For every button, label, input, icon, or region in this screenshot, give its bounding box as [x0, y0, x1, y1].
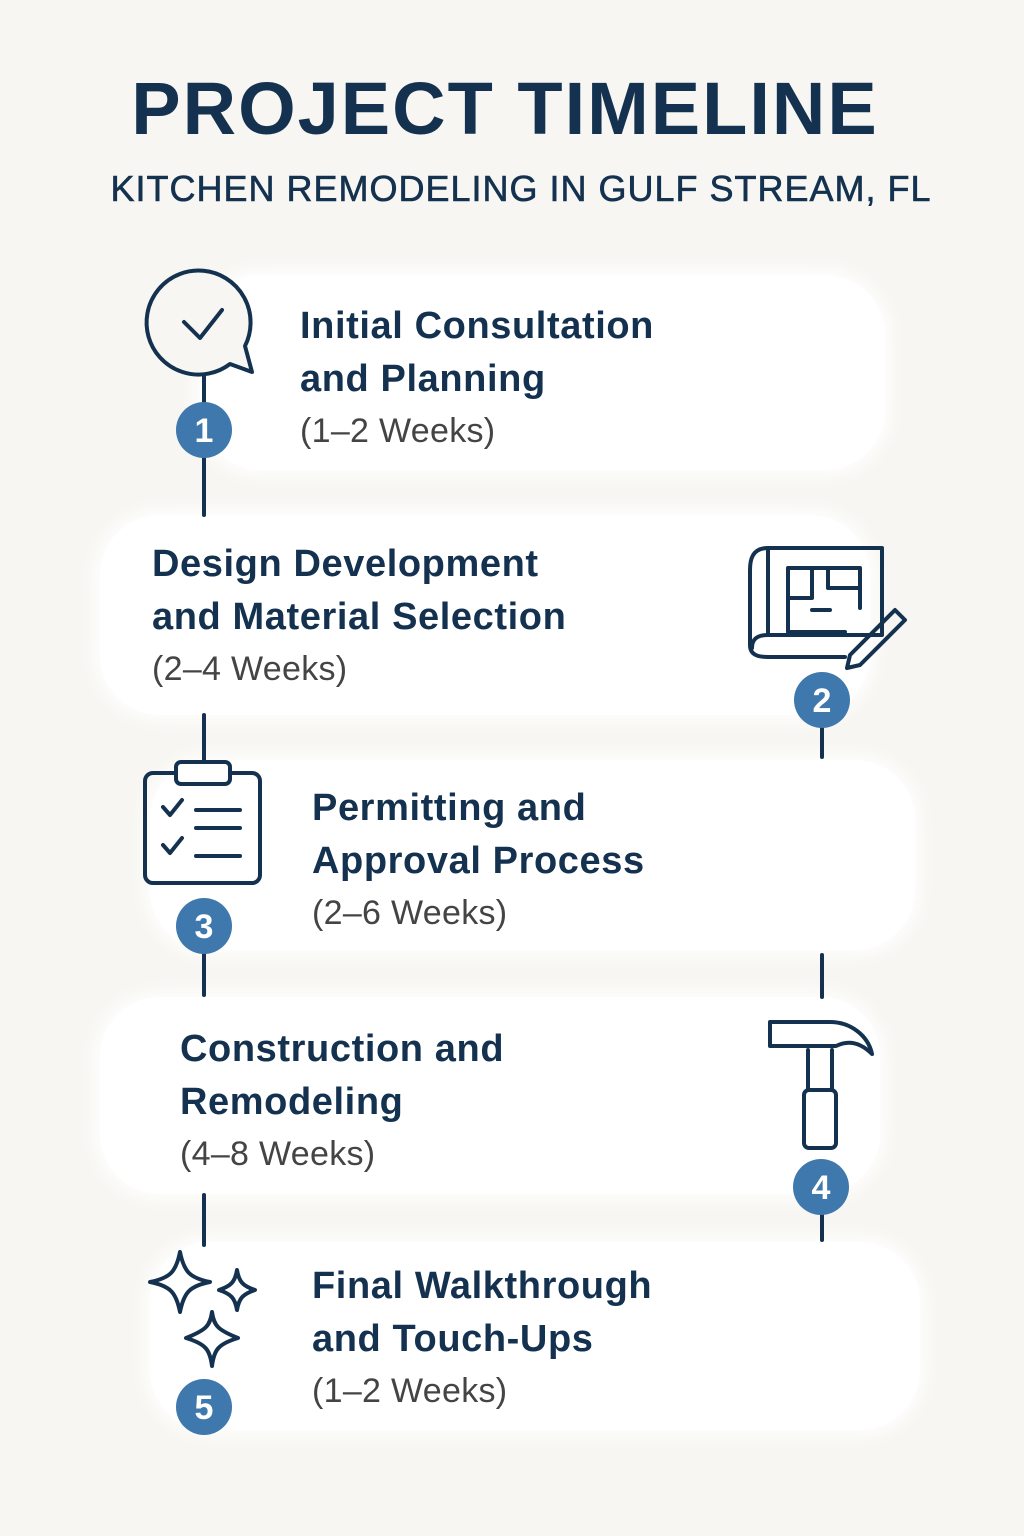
number badges: 5 [195, 1389, 213, 1427]
number badges: 1 [195, 412, 213, 450]
step 3 text: (2–6 Weeks) [312, 894, 507, 932]
card 3 [150, 760, 915, 950]
card 4 [100, 997, 880, 1194]
step 3 text: Permitting and [312, 787, 586, 829]
step 2 text: (2–4 Weeks) [152, 650, 347, 688]
number badges [176, 402, 850, 1435]
icon: chat check [147, 271, 252, 375]
number badges: 3 [195, 908, 213, 946]
step 5 text: Final Walkthrough [312, 1265, 652, 1307]
step 5 text: (1–2 Weeks) [312, 1372, 507, 1410]
title: PROJECT TIMELINE [131, 67, 879, 150]
step 5 text: and Touch-Ups [312, 1318, 594, 1360]
icon: sparkles [150, 1252, 255, 1366]
step 1 text: and Planning [300, 358, 546, 400]
card 2 [100, 515, 870, 715]
card 1 [200, 275, 885, 470]
icon: hammer [770, 1022, 872, 1148]
step 2 text: and Material Selection [152, 596, 566, 638]
step 5 text [312, 1265, 652, 1410]
step 4 text: (4–8 Weeks) [180, 1135, 375, 1173]
step 1 text [300, 305, 654, 450]
step 2 text: Design Development [152, 543, 539, 585]
icon: clipboard [145, 762, 260, 883]
number badges: 4 [812, 1169, 831, 1207]
card 5 [150, 1242, 920, 1430]
step 1 text: (1–2 Weeks) [300, 412, 495, 450]
step 4 text: Construction and [180, 1028, 504, 1070]
step 3 text: Approval Process [312, 840, 645, 882]
step 1 text: Initial Consultation [300, 305, 654, 347]
icon: blueprint [750, 548, 905, 668]
number badges: 2 [813, 682, 831, 720]
step 4 text [180, 1028, 504, 1173]
subtitle: KITCHEN REMODELING IN GULF STREAM, FL [110, 168, 932, 209]
step 4 text: Remodeling [180, 1081, 403, 1123]
step 2 text [152, 543, 566, 688]
step 3 text [312, 787, 645, 932]
